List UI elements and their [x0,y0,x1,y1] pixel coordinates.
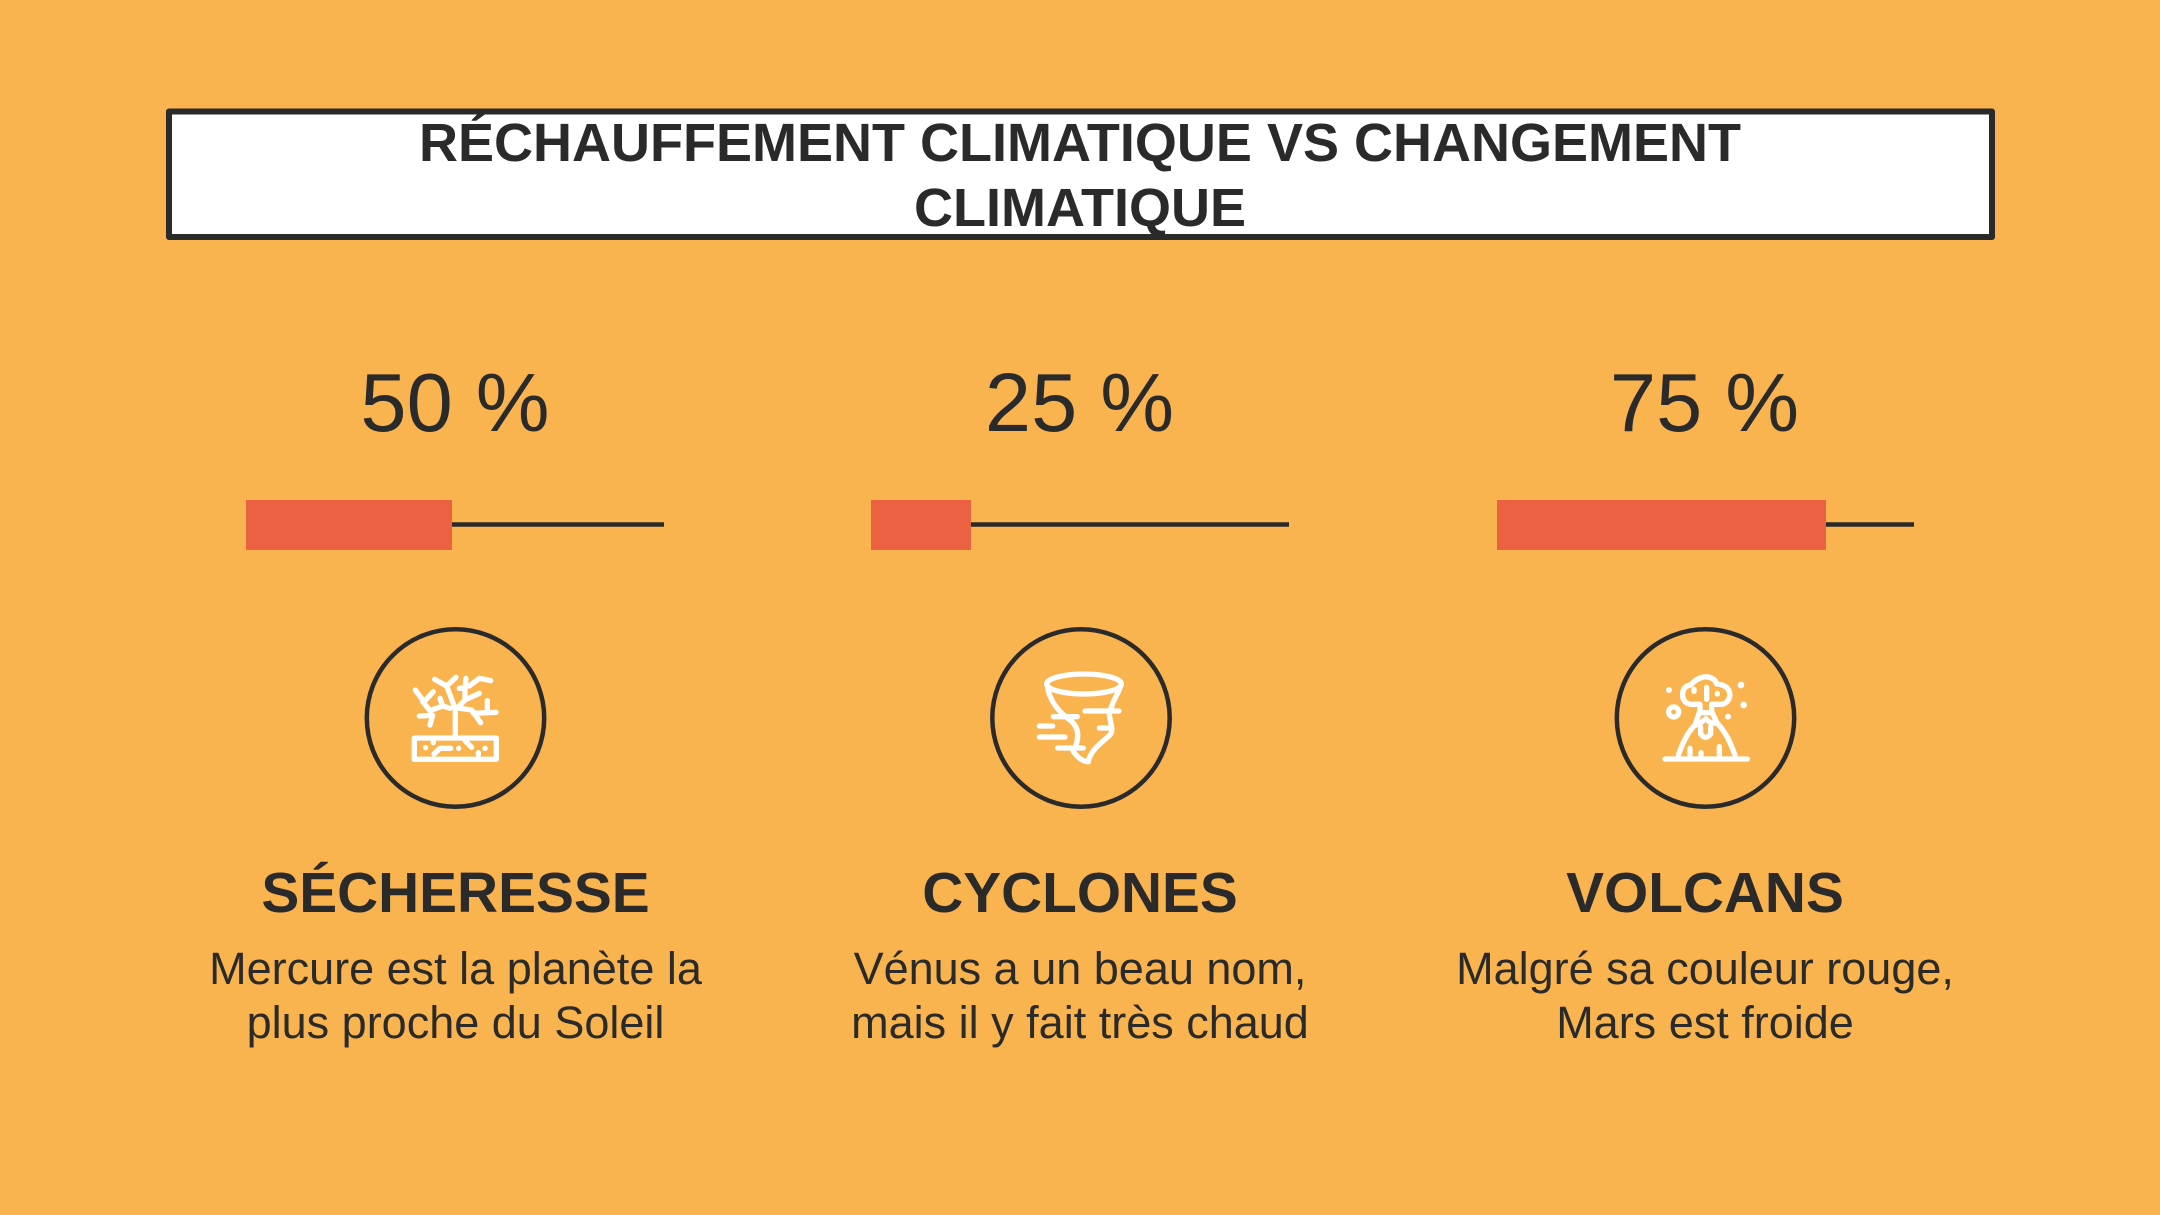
title: CLIMATIQUE [914,178,1246,238]
description: volcans [1456,943,1954,1048]
description: cyclones [851,943,1309,1048]
icon: volcano [1617,629,1794,807]
description: volcans: Malgré sa couleur rouge, [1456,943,1954,994]
progress bar: 75 % [1497,500,1914,550]
description: volcans: Mars est froide [1556,997,1854,1048]
panel: cyclones [851,356,1309,1048]
description: cyclones: mais il y fait très chaud [851,997,1309,1048]
description: sécheresse [209,943,703,1048]
progress bar: 50 % [246,500,664,550]
title [169,112,1992,238]
progress bar: 25 % [871,500,1289,550]
icon: dead tree on dry ground [367,629,544,807]
title: RÉCHAUFFEMENT CLIMATIQUE VS CHANGEMENT [419,113,1741,173]
icon: tornado [992,629,1170,807]
percentage: 25 %: 25 % [985,356,1174,449]
description: sécheresse: Mercure est la planète la [209,943,703,994]
heading: volcans: VOLCANS [1566,862,1844,925]
heading: sécheresse: SÉCHERESSE [261,861,650,925]
heading: cyclones: CYCLONES [922,862,1238,925]
percentage: 50 %: 50 % [360,356,550,449]
description: sécheresse: plus proche du Soleil [247,997,664,1048]
percentage: 75 %: 75 % [1610,356,1799,449]
panel: sécheresse [209,356,703,1048]
description: cyclones: Vénus a un beau nom, [854,943,1306,994]
panel: volcans [1456,356,1954,1048]
